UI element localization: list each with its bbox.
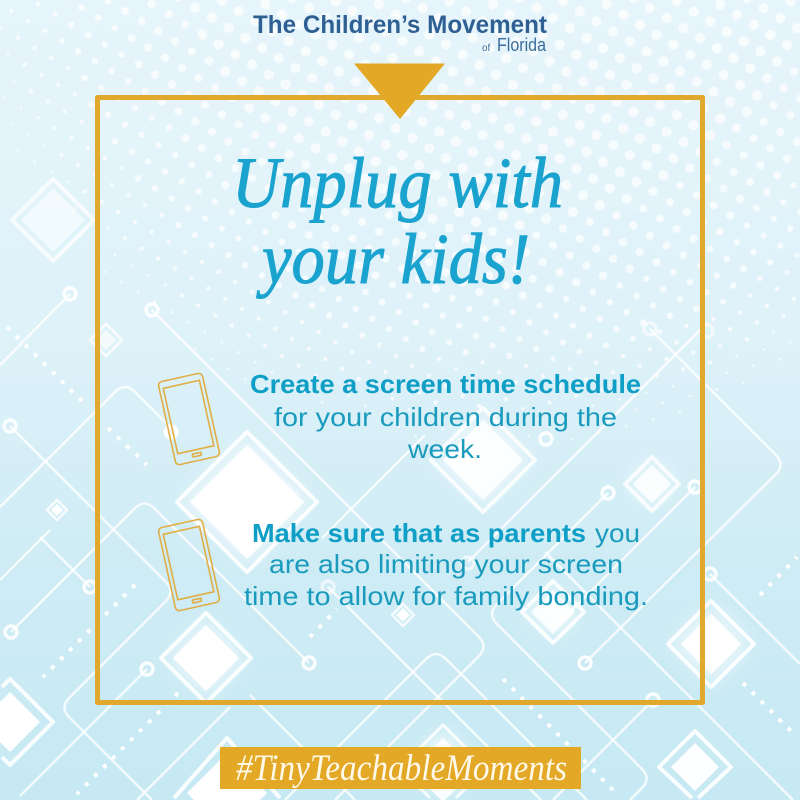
text block: parents limiting screen time xyxy=(244,518,648,611)
text block: parents limiting screen time: you xyxy=(595,518,640,548)
text block: screen time schedule: for your children during the xyxy=(274,402,617,432)
background circuit nodes xyxy=(4,288,716,706)
logo: of xyxy=(482,43,491,54)
title: Unplug with xyxy=(232,143,563,223)
background diamonds xyxy=(0,179,754,800)
gold triangle pointer xyxy=(354,64,445,119)
background dotted lines xyxy=(7,327,797,794)
gold frame xyxy=(98,98,702,702)
text block: parents limiting screen time: Make sure that as parents xyxy=(252,518,586,548)
background diamond glows xyxy=(168,416,749,790)
icon: phone 2 xyxy=(158,519,220,611)
logo: Florida xyxy=(497,35,547,55)
title: your kids! xyxy=(256,219,530,299)
text block: screen time schedule: Create a screen time schedule xyxy=(250,369,641,399)
text block: screen time schedule: week. xyxy=(407,434,482,464)
logo xyxy=(253,11,548,55)
background circuit lines xyxy=(0,294,800,800)
text block: screen time schedule xyxy=(250,369,641,464)
title xyxy=(232,143,563,299)
logo: The Children’s Movement xyxy=(253,11,548,39)
text block: parents limiting screen time: are also limiting your screen xyxy=(269,549,623,579)
text block: parents limiting screen time: time to allow for family bonding. xyxy=(244,581,648,611)
hashtag badge: #TinyTeachableMoments xyxy=(236,748,567,789)
background dot pattern xyxy=(0,0,800,446)
icon: phone 1 xyxy=(158,373,220,465)
